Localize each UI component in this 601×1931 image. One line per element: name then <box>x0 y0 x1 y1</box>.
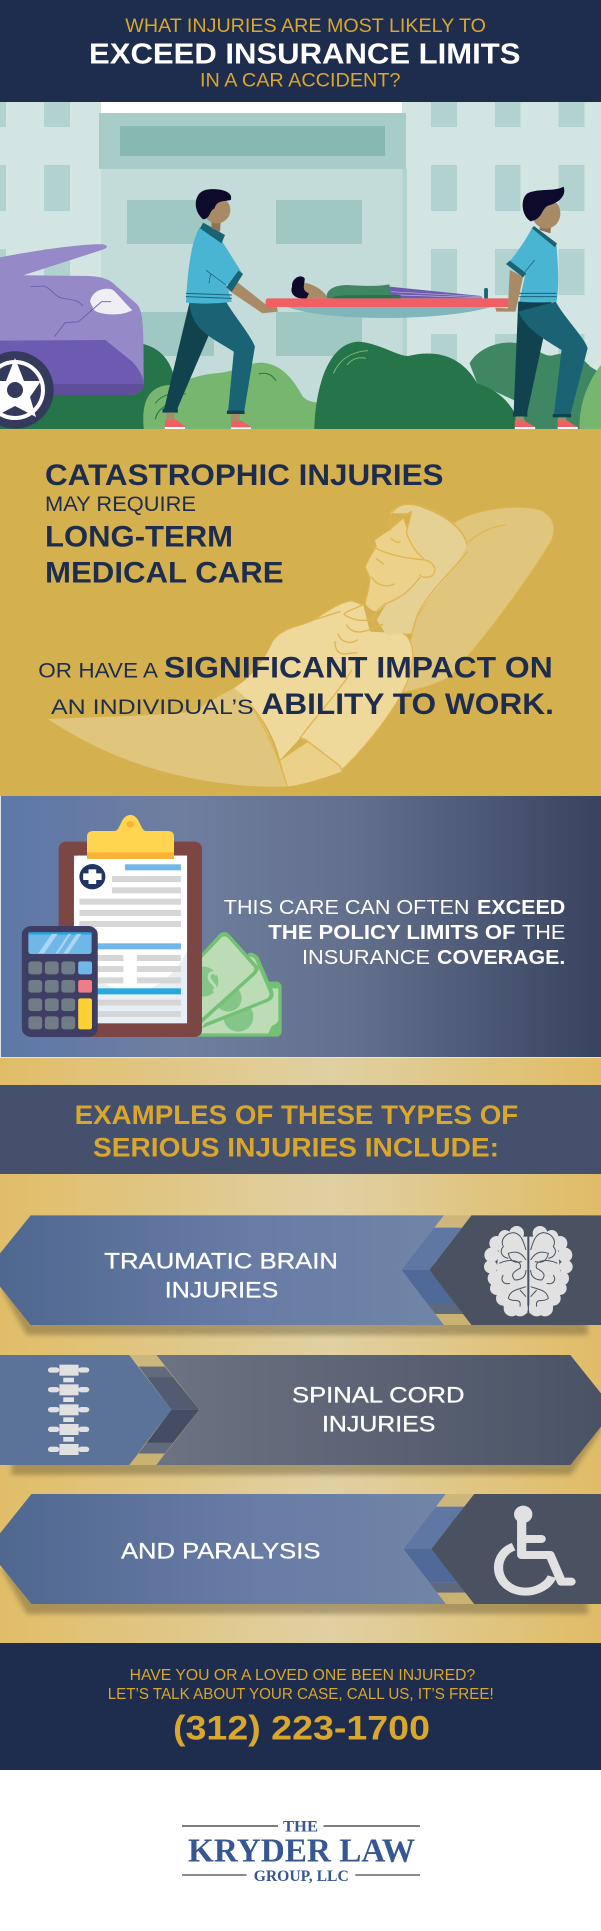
hero illustration: car accident scene <box>0 102 601 429</box>
text: catastrophic injuries: CATASTROPHIC INJURIES <box>45 459 443 492</box>
text: this care can often exceed the policy limits: COVERAGE. <box>437 946 565 969</box>
city backdrop windows <box>0 102 584 380</box>
hospital building <box>99 102 407 429</box>
text: significant impact on: SIGNIFICANT IMPACT ON <box>164 652 553 685</box>
label: TRAUMATIC BRAIN <box>104 1248 338 1273</box>
text: this care can often exceed the policy limits: EXCEED <box>477 896 565 919</box>
label: INJURIES <box>322 1412 435 1437</box>
heading line 1: EXAMPLES OF THESE TYPES OF <box>75 1100 518 1130</box>
label <box>104 1248 338 1303</box>
call to action footer <box>0 1643 601 1770</box>
cta line 2: LET’S TALK ABOUT YOUR CASE, CALL US, IT’S FREE! <box>108 1686 494 1703</box>
logo line: group llc: GROUP, LLC <box>254 1868 349 1885</box>
text: medical care: MEDICAL CARE <box>45 557 284 590</box>
cta line 1: HAVE YOU OR A LOVED ONE BEEN INJURED? <box>130 1667 476 1684</box>
medic right <box>495 187 588 429</box>
row: paralysis <box>0 1494 601 1614</box>
text: an individual's: AN INDIVIDUAL’S <box>51 696 254 719</box>
icon: brain <box>484 1226 573 1316</box>
injury arrow rows <box>0 1215 601 1614</box>
text: this care can often exceed the policy limits: THE POLICY LIMITS OF <box>268 921 516 944</box>
heading line 1: WHAT INJURIES ARE MOST LIKELY TO <box>125 16 486 37</box>
heading line 2: EXCEED INSURANCE LIMITS <box>89 38 520 70</box>
icon: spine <box>48 1365 89 1455</box>
row: spinal cord injuries <box>0 1355 601 1475</box>
logo line: the: THE <box>283 1819 318 1836</box>
icon: clipboard <box>59 815 202 1037</box>
text: or have a: OR HAVE A <box>38 660 158 683</box>
gold panel: catastrophic injuries <box>0 429 601 796</box>
logo line: kryder law: KRYDER LAW <box>188 1833 415 1870</box>
row: traumatic brain injuries <box>0 1215 601 1335</box>
label: INJURIES <box>165 1278 278 1303</box>
icon: calculator <box>22 926 98 1037</box>
damaged purple car <box>0 244 144 395</box>
phone number: (312) 223-1700 <box>173 1709 430 1747</box>
stretcher with patient <box>266 276 511 318</box>
bushes <box>0 342 601 429</box>
examples heading band <box>0 1085 601 1174</box>
gold gradient background <box>0 1058 601 1644</box>
label: SPINAL CORD <box>292 1383 464 1408</box>
text: this care can often exceed the policy limits: THIS CARE CAN OFTEN <box>224 896 470 919</box>
logo: the kryder law group <box>182 1819 420 1885</box>
text: may require: MAY REQUIRE <box>45 493 196 516</box>
label <box>292 1383 464 1437</box>
patient lying with oxygen tube <box>48 504 554 787</box>
heading line 3: IN A CAR ACCIDENT? <box>200 71 400 92</box>
slate panel: policy limits <box>0 796 601 1058</box>
heading line 2: SERIOUS INJURIES INCLUDE: <box>93 1133 499 1163</box>
icon: money <box>188 932 282 1037</box>
icons: clipboard and calculator <box>22 815 202 1037</box>
text: this care can often exceed the policy limits <box>224 896 565 969</box>
label: AND PARALYSIS <box>121 1539 320 1564</box>
car wheel <box>0 351 54 429</box>
header banner <box>0 0 601 102</box>
text: this care can often exceed the policy limits: INSURANCE <box>302 946 430 969</box>
text: this care can often exceed the policy limits: THE <box>522 921 565 944</box>
scene drawing <box>0 187 601 429</box>
text: long-term: LONG-TERM <box>45 521 233 554</box>
icon: wheelchair <box>499 1506 571 1592</box>
medic left <box>163 189 278 429</box>
text: ability to work: ABILITY TO WORK. <box>261 688 554 721</box>
